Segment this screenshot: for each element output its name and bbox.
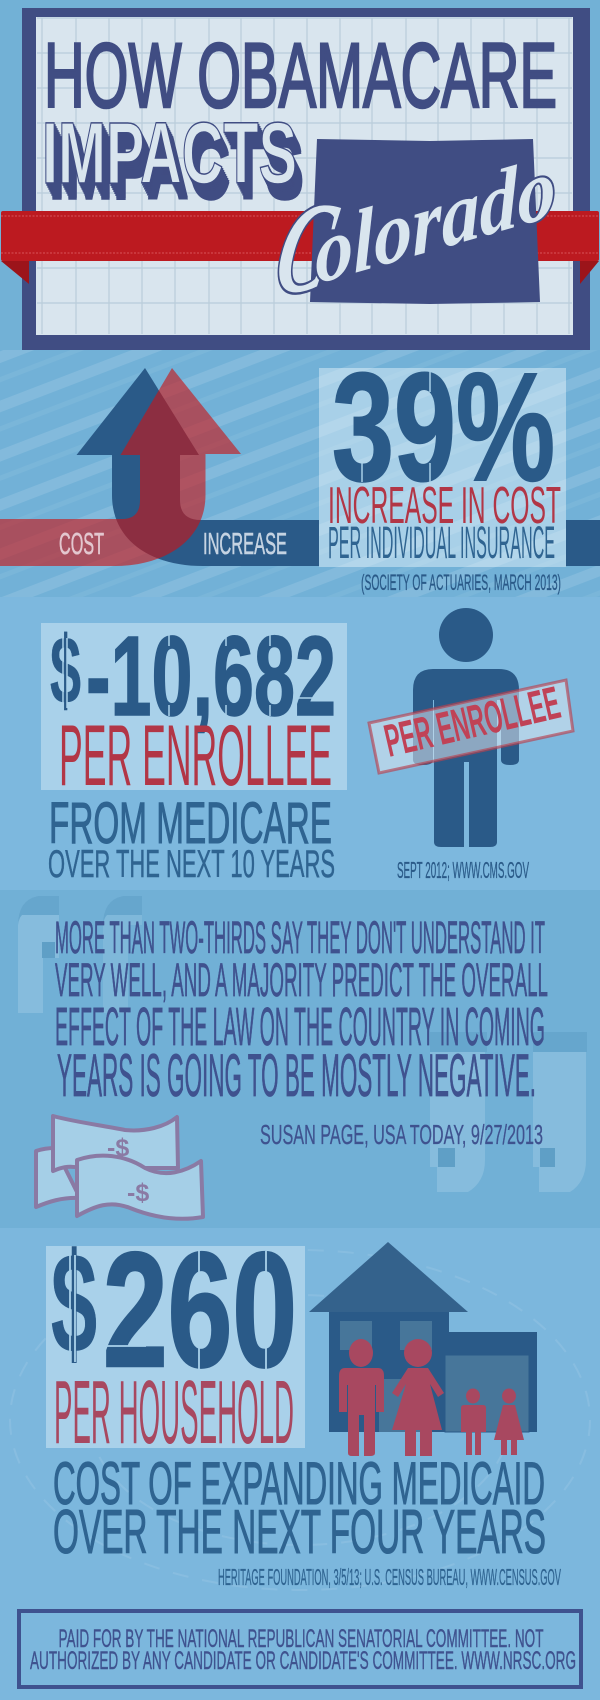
text: over the next 10 years: OVER THE NEXT 10 YEARS [48,843,335,886]
panel: per household [0,1218,600,1700]
colorado script lettering: olorado [313,136,557,303]
red ribbon [1,211,599,284]
icon: dollar bills: -$ [127,1179,149,1207]
big number: 260 [103,1218,297,1401]
heading: impacts: IMPACTS [49,121,304,218]
heading: impacts: IMPACTS [47,115,302,212]
panel: title header [0,0,600,350]
panel: 39 percent increase [0,341,600,597]
colorado script lettering: C [265,176,348,321]
opening quotation marks [18,896,142,1013]
heading: impacts [42,105,304,218]
text: from medicare: FROM MEDICARE [49,791,332,856]
heading: impacts: IMPACTS [46,113,301,210]
heading: impacts: IMPACTS [43,107,298,204]
big number: -10,682 [86,613,336,739]
big number [51,1218,297,1401]
colorado script lettering [265,136,557,321]
red up arrow [0,368,241,566]
closing quotation marks [430,1032,587,1192]
big number: $ [51,1224,97,1383]
stat box: per enrollee [41,613,347,804]
heading: impacts: IMPACTS [42,105,297,202]
icon: dollar bills: -$ [107,1134,129,1162]
big number [50,613,336,739]
footer disclaimer box [19,1611,581,1687]
quote text [55,912,548,1109]
title frame [22,8,590,350]
stat box: 260 [46,1218,305,1463]
panel: quote [0,890,600,1228]
icon: person with stamp [369,608,573,847]
colorado state shape [310,139,540,304]
stamp: per enrollee [369,676,573,773]
label: increase: INCREASE [203,526,287,561]
heading: impacts: IMPACTS [45,111,300,208]
heading: impacts: IMPACTS [44,109,299,206]
icon: dollar bills [36,1116,203,1219]
panel: per enrollee [0,597,600,890]
label: cost: COST [59,526,104,561]
icon: house [309,1242,537,1432]
icon: family [339,1339,524,1456]
blue up arrow [76,368,600,566]
heading: impacts: IMPACTS [49,119,304,216]
stat box: 39 percent [319,341,566,568]
big number: $ [50,617,81,724]
heading: impacts: IMPACTS [48,117,303,214]
